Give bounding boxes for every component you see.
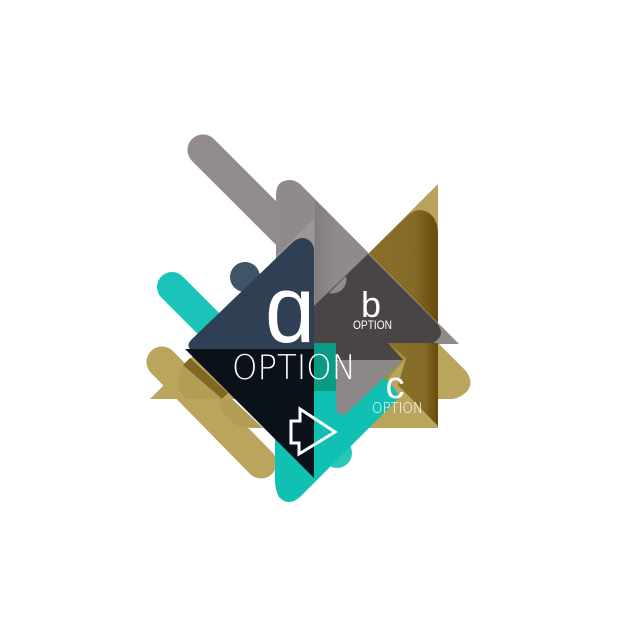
navy knob	[230, 262, 260, 292]
navy diamond panel a	[188, 238, 314, 349]
grey knob	[329, 276, 346, 293]
dark panel b	[314, 254, 441, 344]
letter c: c	[386, 365, 404, 407]
letter a: ɑ	[265, 256, 315, 363]
brown panel c	[388, 343, 438, 426]
gold left triangle	[150, 350, 249, 399]
option label c: OPTION	[372, 399, 423, 417]
grey light facet	[277, 219, 314, 300]
grey diagonal bar	[203, 150, 300, 247]
teal knob	[322, 438, 352, 468]
gold overlap shading	[178, 358, 314, 428]
icon: outlined arrow	[291, 409, 335, 454]
black triangle panel	[185, 349, 314, 478]
gold rounded panel c	[314, 343, 471, 428]
gold diagonal bar	[162, 362, 261, 463]
option label a: OPTION	[232, 348, 356, 388]
grey panel under b	[336, 343, 403, 415]
grey shaded fold	[315, 200, 336, 307]
letter b: b	[361, 284, 381, 325]
gold upper triangle	[300, 184, 438, 344]
gold wedge beside grey panel	[385, 343, 406, 382]
option label b: OPTION	[353, 318, 392, 332]
teal large triangle	[275, 300, 400, 502]
grey large triangle	[276, 180, 459, 344]
teal diagonal bar	[172, 287, 240, 355]
